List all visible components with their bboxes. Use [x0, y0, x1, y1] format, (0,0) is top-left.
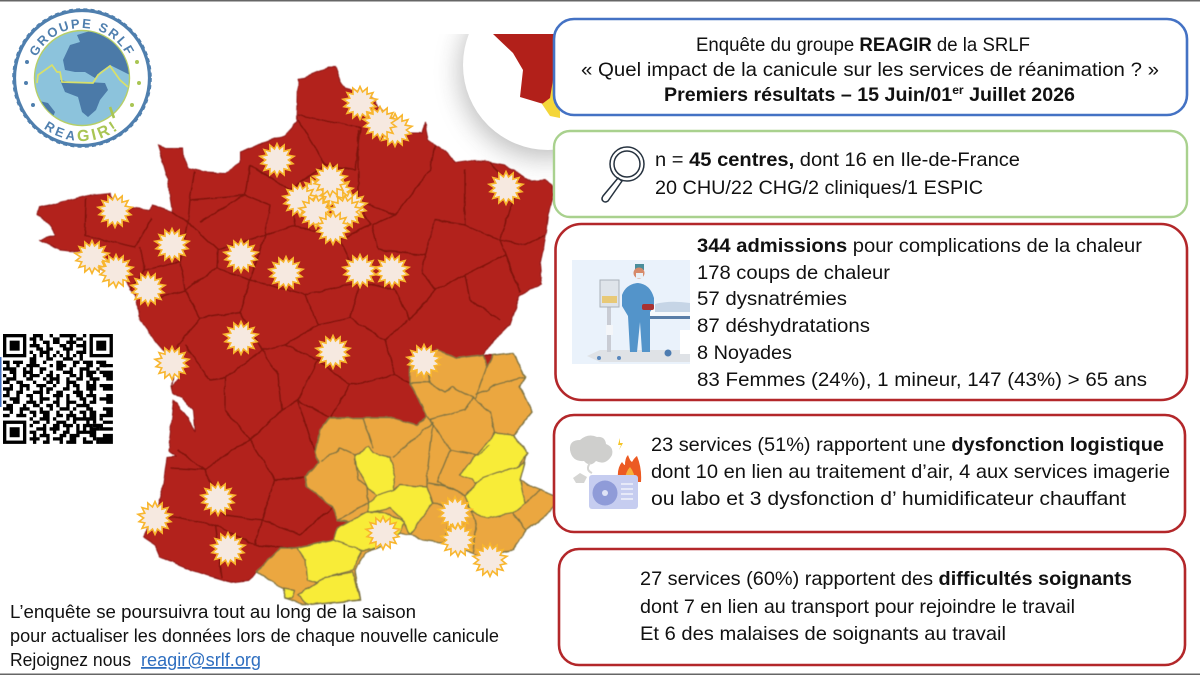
panel: survey title: Enquête du groupe REAGIR de la SRLF: [696, 34, 1030, 56]
panel: logistics: 23 services (51%) rapportent une dysfonction logistique: [651, 434, 1164, 456]
footer note: [10, 602, 499, 670]
logo: Groupe SRLF REAGIR: REAGIR!: [44, 121, 117, 142]
icon: burning air conditioner: [570, 436, 641, 509]
panel: survey title: [554, 19, 1187, 115]
panel: staff difficulties: 27 services (60%) rapportent des difficultés soignants: [640, 568, 1132, 590]
panel: centres: n = 45 centres, dont 16 en Ile-de-France: [655, 149, 1020, 171]
footer note: reagir@srlf.org: [141, 650, 261, 670]
panel: logistics: dont 10 en lien au traitement d’air, 4 aux services imagerie: [651, 461, 1170, 483]
panel: survey title: Juillet 2026: [964, 84, 1075, 106]
panel: survey title: « Quel impact de la canicule sur les services de réanimation ? »: [581, 59, 1159, 81]
department borders: [85, 115, 545, 578]
panel: admissions: 87 déshydratations: [697, 315, 870, 337]
orange department borders: [320, 350, 540, 553]
yellow departments: [283, 433, 528, 605]
panel: admissions: 8 Noyades: [697, 342, 792, 364]
QR code: [3, 336, 113, 442]
panel: staff difficulties: [559, 549, 1185, 665]
inset map: overseas circle: [447, 34, 560, 171]
footer note: pour actualiser les données lors de chaque nouvelle canicule: [10, 626, 499, 646]
map of France: heat alert levels: [38, 66, 558, 605]
panel: logistics: ou labo et 3 dysfonction d’ humidificateur chauffant: [651, 488, 1127, 510]
panel: staff difficulties: Et 6 des malaises de soignants au travail: [640, 623, 1006, 645]
footer note: Rejoignez nous: [10, 650, 131, 670]
panel: survey title: er: [952, 83, 964, 97]
red departments: [38, 66, 558, 605]
icon: doctor at hospital bed: [572, 260, 690, 364]
panel: logistics: [554, 415, 1185, 532]
logo: Groupe SRLF REAGIR: [12, 8, 152, 148]
panel: survey title: Premiers résultats – 15 Juin/01: [664, 84, 950, 106]
panel: staff difficulties: dont 7 en lien au transport pour rejoindre le travail: [640, 596, 1075, 618]
panel: centres: [554, 131, 1187, 217]
orange departments: [257, 350, 558, 605]
panel: admissions: 178 coups de chaleur: [697, 262, 891, 284]
panel: admissions: 344 admissions pour complications de la chaleur: [697, 235, 1143, 257]
heat wave sites: star markers: [75, 86, 523, 576]
panel: centres: 20 CHU/22 CHG/2 cliniques/1 ESPIC: [655, 177, 983, 199]
logo: Groupe SRLF REAGIR: GROUPE SRLF: [30, 18, 134, 56]
panel: admissions: 83 Femmes (24%), 1 mineur, 147 (43%) > 65 ans: [697, 369, 1147, 391]
panel: admissions: 57 dysnatrémies: [697, 288, 847, 310]
icon: magnifying glass: [602, 147, 644, 202]
footer note: L’enquête se poursuivra tout au long de la saison: [10, 602, 416, 622]
panel: admissions: [556, 224, 1187, 400]
